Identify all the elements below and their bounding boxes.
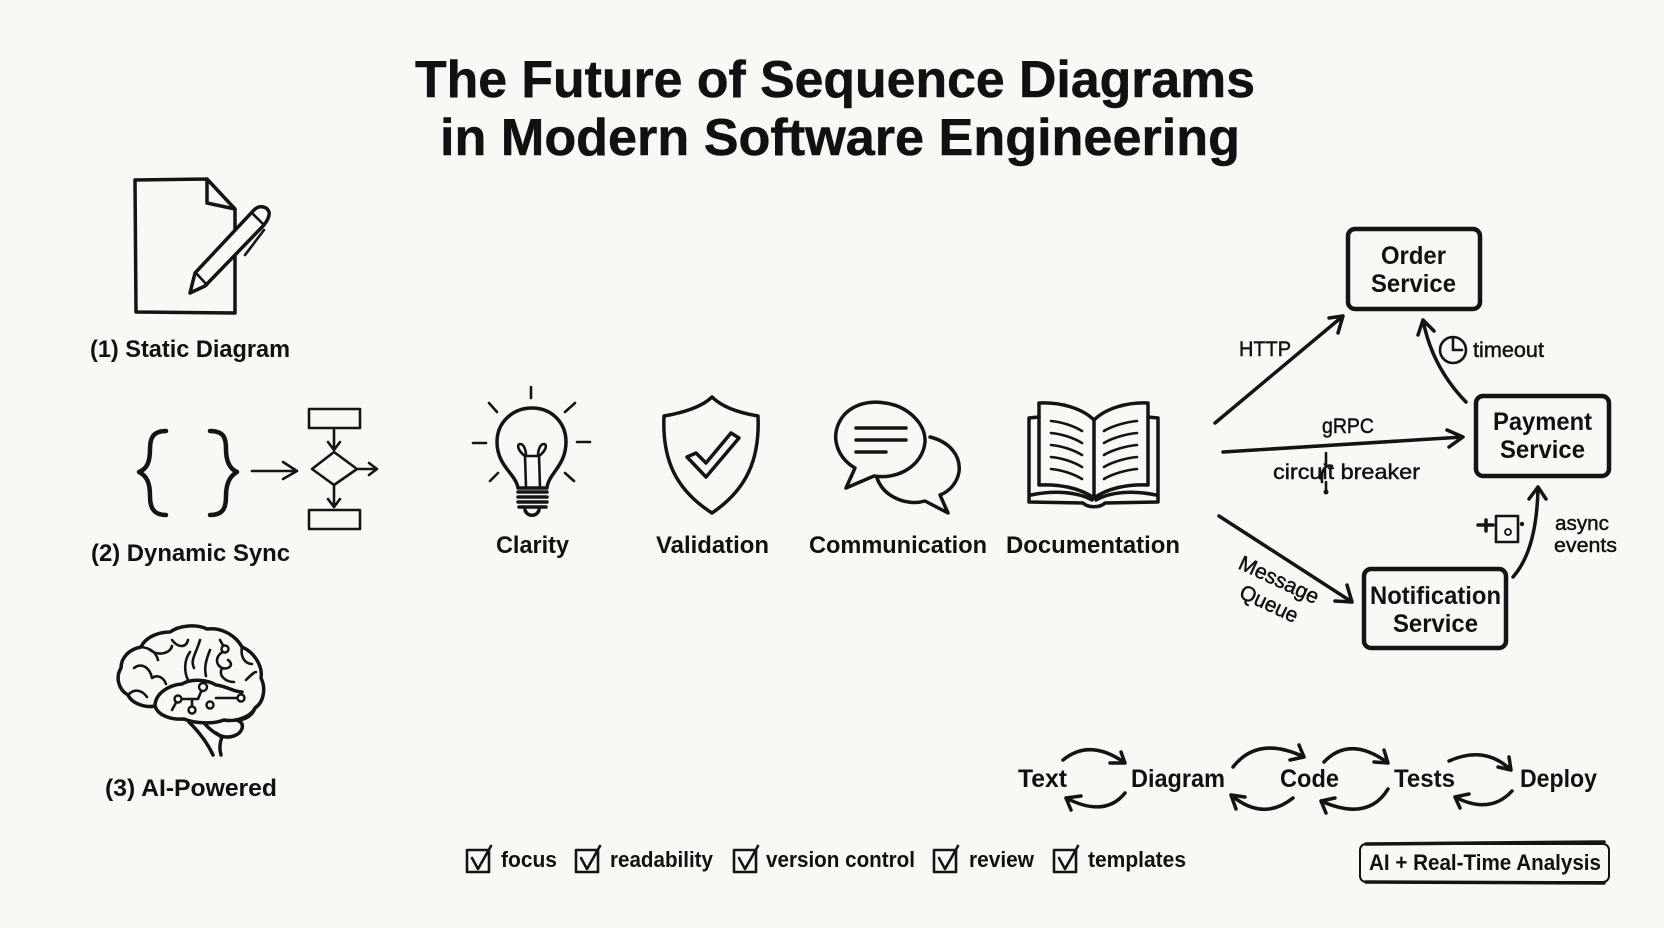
label: async events: async (1555, 513, 1609, 535)
title (415, 51, 1255, 167)
title: in Modern Software Engineering (440, 109, 1240, 167)
panel: benefits (473, 387, 1180, 559)
label: async events (1554, 513, 1617, 557)
icon: light bulb (473, 387, 590, 515)
check item: focus: focus (501, 847, 557, 872)
label: http: HTTP (1239, 338, 1291, 361)
label: circuit breaker: circuit breaker (1273, 461, 1420, 484)
order service box: Order (1381, 242, 1446, 270)
payment service box: Service (1500, 436, 1585, 464)
panel: pipeline (1018, 745, 1597, 813)
check item: review: review (969, 847, 1035, 872)
panel: evolution stages (90, 179, 377, 802)
pipeline labels: Text (1018, 765, 1068, 793)
pipeline arrows (1063, 745, 1512, 813)
panel: checklist (467, 846, 1186, 872)
labels: benefits: Clarity (496, 532, 570, 559)
icon: speech bubbles (836, 402, 959, 513)
icon: circuit breaker switch (1322, 453, 1332, 494)
label: dynamic sync: (2) Dynamic Sync (91, 540, 290, 567)
icon: shield with check (664, 397, 758, 513)
label: timeout: timeout (1473, 339, 1544, 362)
notification service box (1364, 569, 1506, 648)
icon: event box (1478, 516, 1524, 542)
notification service box: Service (1393, 610, 1478, 638)
labels: benefits: Documentation (1006, 532, 1180, 559)
order service box (1348, 229, 1480, 309)
check item: templates (1054, 846, 1186, 872)
pipeline labels: Diagram (1131, 765, 1225, 793)
icon: code braces to flowchart (139, 409, 377, 529)
label: message queue: Message (1235, 552, 1323, 609)
check item: readability: readability (610, 847, 714, 872)
check item: templates: templates (1088, 847, 1186, 872)
title: The Future of Sequence Diagrams (415, 51, 1255, 109)
pipeline labels: Deploy (1520, 765, 1597, 793)
label: async events: events (1554, 535, 1617, 557)
icon: open book (1029, 403, 1158, 507)
icon: document and pen (135, 179, 269, 313)
panel: microservices diagram (1215, 229, 1617, 648)
check item: review (934, 846, 1035, 872)
check item: readability (576, 846, 714, 872)
check item: focus (467, 846, 557, 872)
icon: clock (1440, 337, 1466, 363)
order service box: Service (1371, 270, 1456, 298)
labels: benefits (496, 532, 1180, 559)
arrow: grpc (1223, 430, 1463, 452)
arrow: message queue (1219, 516, 1352, 602)
label: static diagram: (1) Static Diagram (90, 336, 290, 363)
pipeline labels (1018, 765, 1597, 793)
label: grpc: gRPC (1322, 415, 1374, 438)
callout: ai + real-time analysis: AI + Real-Time Analysis (1369, 850, 1601, 875)
arrow: async events (1513, 487, 1546, 577)
label: ai-powered: (3) AI-Powered (105, 775, 277, 802)
pipeline labels: Code (1280, 765, 1339, 793)
payment service box: Payment (1493, 408, 1593, 436)
notification service box: Notification (1370, 582, 1501, 610)
arrow: timeout (1418, 320, 1466, 402)
icon: brain with circuit nodes (118, 626, 264, 755)
label: message queue: Queue (1236, 581, 1302, 628)
payment service box (1476, 396, 1609, 476)
callout: ai + real-time analysis (1360, 842, 1609, 883)
labels: benefits: Validation (656, 532, 769, 559)
check item: version control: version control (766, 847, 915, 872)
pipeline labels: Tests (1394, 765, 1455, 793)
labels: benefits: Communication (809, 532, 987, 559)
arrow: http (1215, 316, 1343, 423)
